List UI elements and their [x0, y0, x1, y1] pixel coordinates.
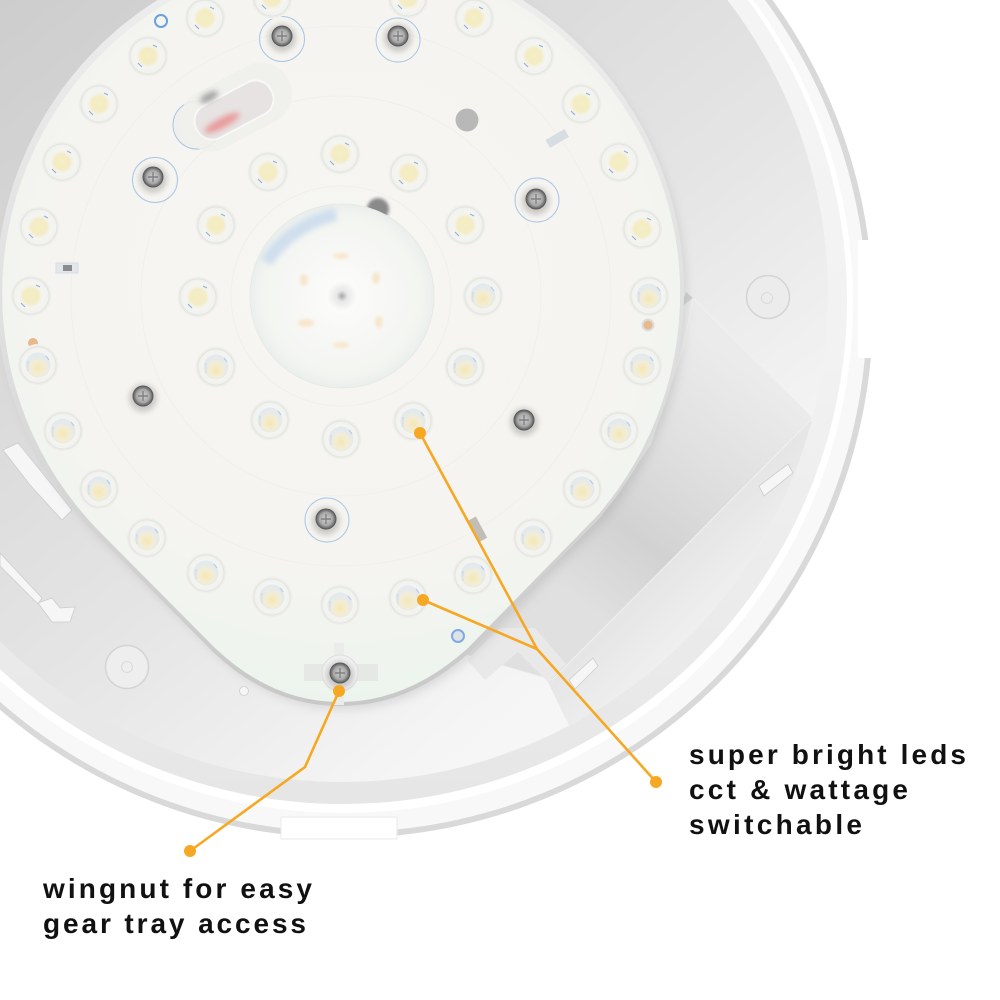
hole [456, 108, 478, 132]
housing interior [0, 0, 828, 782]
leader: wingnut [190, 691, 339, 851]
tray notch [684, 292, 693, 305]
outer rim [0, 0, 900, 870]
leader: super bright leds [420, 433, 656, 782]
centre dome [250, 198, 434, 388]
callout dots [184, 427, 662, 857]
callout text: wingnut: wingnut for easy [42, 873, 312, 904]
right edge notch [858, 240, 874, 358]
LED circuit board [0, 0, 684, 706]
small components [28, 129, 654, 542]
board shadow [2, 0, 686, 709]
tray clips [0, 443, 793, 696]
lamp housing [0, 0, 900, 870]
callout text: wingnut: gear tray access [43, 908, 306, 939]
board concentric traces [71, 26, 611, 566]
inner LED ring [177, 133, 504, 460]
wingnut [304, 643, 378, 705]
tray lower panel [548, 420, 812, 726]
callout lines [190, 433, 656, 851]
mounting boss left [106, 646, 148, 688]
slide switch [169, 52, 303, 162]
screws [129, 24, 550, 535]
callout text: super bright leds: super bright leds [689, 739, 966, 770]
blue rings [132, 15, 559, 642]
mounting boss right [746, 276, 790, 318]
callout text: super bright leds: switchable [689, 809, 862, 840]
gear tray top panel [468, 384, 812, 680]
outer LED ring [10, 0, 670, 626]
tray step [467, 628, 566, 682]
callout text: super bright leds: cct & wattage [689, 774, 908, 805]
bottom edge notch [281, 817, 397, 839]
leader: second LED [423, 600, 537, 649]
